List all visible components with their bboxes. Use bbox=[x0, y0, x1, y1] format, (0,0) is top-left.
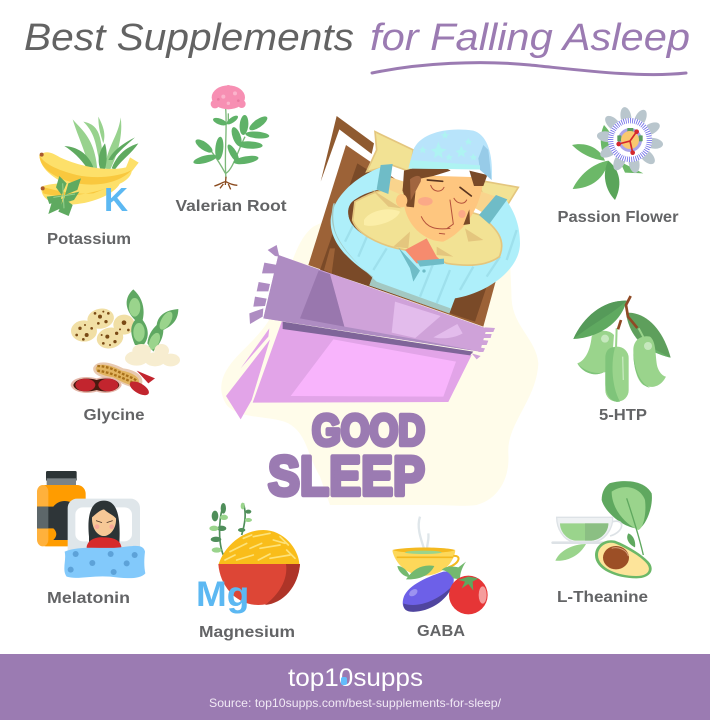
hair bbox=[403, 163, 487, 225]
central illustration: good sleep bbox=[221, 116, 538, 506]
icon: bowl with Mg symbol: Mg bbox=[196, 575, 249, 614]
background blob bbox=[221, 223, 538, 506]
pillow creases bbox=[372, 189, 483, 257]
cheeks bbox=[418, 197, 433, 206]
item: potassium bbox=[39, 117, 139, 248]
label: L-Theanine bbox=[557, 589, 648, 606]
door bbox=[308, 116, 503, 327]
item: glycine bbox=[71, 289, 180, 424]
pyjama body and arms bbox=[331, 164, 520, 313]
item: valerian root bbox=[176, 85, 287, 215]
label: GABA bbox=[417, 623, 465, 640]
item: GABA bbox=[392, 517, 488, 640]
icon: passion flower bbox=[572, 106, 664, 200]
pillow back right bbox=[477, 180, 518, 212]
label: Passion Flower bbox=[558, 209, 678, 226]
neck and collar bbox=[405, 238, 444, 263]
pyjama stripes bbox=[345, 222, 517, 303]
icon: tea, greens and avocado bbox=[553, 481, 652, 578]
forearms bbox=[389, 177, 496, 213]
nightcap bbox=[408, 130, 492, 180]
icon: soup, eggplant and tomato bbox=[392, 517, 488, 614]
label: 5-HTP bbox=[599, 407, 647, 424]
title bbox=[24, 17, 690, 75]
fringe bbox=[249, 245, 279, 324]
label: Valerian Root bbox=[176, 198, 287, 215]
label: Glycine bbox=[84, 407, 145, 424]
good sleep lettering bbox=[268, 406, 425, 507]
gap behind pillow bbox=[348, 195, 367, 233]
item: magnesium bbox=[196, 503, 300, 641]
face bbox=[403, 175, 483, 242]
label: Magnesium bbox=[199, 624, 295, 641]
brand logo: top10supps bbox=[288, 664, 423, 692]
source line: Source: top10supps.com/best-supplements-for-sleep/ bbox=[209, 696, 502, 710]
label: Potassium bbox=[47, 231, 131, 248]
item: passion flower bbox=[558, 106, 678, 226]
facial features bbox=[421, 180, 471, 234]
pillow front bbox=[353, 188, 502, 265]
icon: valerian plant bbox=[192, 85, 270, 189]
item: melatonin bbox=[37, 471, 145, 607]
good sleep lettering: SLEEP bbox=[268, 444, 425, 507]
item: L-theanine bbox=[553, 481, 652, 606]
pillow back left bbox=[367, 132, 413, 172]
icon: bananas and leaves: K bbox=[104, 182, 128, 219]
label: Melatonin bbox=[47, 590, 130, 607]
title: for Falling Asleep bbox=[370, 17, 690, 59]
cuffs bbox=[377, 164, 393, 194]
title: Best Supplements bbox=[24, 17, 354, 59]
icon: bottle and sleeping woman bbox=[37, 471, 145, 578]
icon: griffonia pods bbox=[573, 296, 671, 402]
footer band bbox=[0, 654, 710, 720]
blanket lower bbox=[253, 322, 472, 403]
item: 5-HTP bbox=[573, 296, 671, 424]
icon: seeds, beans and peanuts bbox=[71, 289, 180, 398]
blanket fold bbox=[263, 255, 487, 352]
good sleep lettering: GOOD bbox=[312, 406, 425, 455]
